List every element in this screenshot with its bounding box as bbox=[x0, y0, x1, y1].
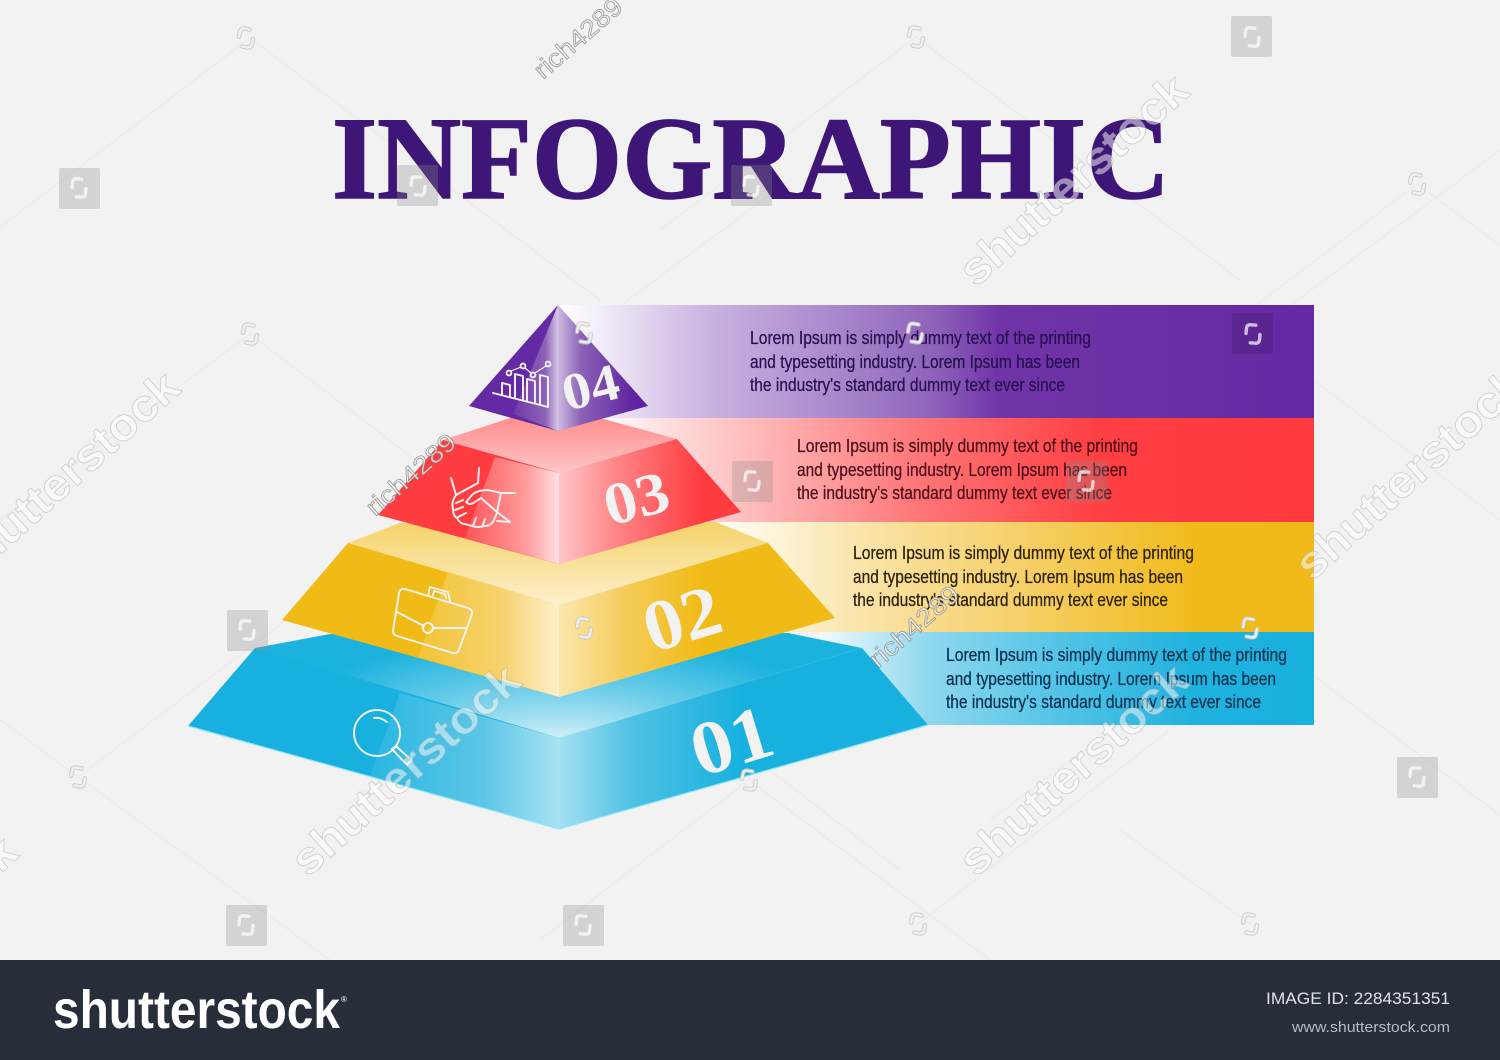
text block: banner 04: the industry's standard dummy text ever since bbox=[750, 375, 1065, 395]
text block: banner 02 bbox=[853, 543, 1194, 610]
text block: banner 01 bbox=[946, 645, 1287, 712]
watermark: shutterstock text: shutterstock bbox=[949, 63, 1199, 295]
text block: banner 03: and typesetting industry. Lorem Ipsum has been bbox=[797, 460, 1127, 480]
panel: banner 04 bbox=[558, 305, 1314, 418]
registered mark: ® bbox=[341, 995, 347, 1004]
text block: banner 04: and typesetting industry. Lorem Ipsum has been bbox=[750, 352, 1080, 372]
text block: banner 01: the industry's standard dummy text ever since bbox=[946, 692, 1261, 712]
watermark: shutterstock text: shutterstock bbox=[281, 653, 531, 885]
footer logo: shutterstock bbox=[53, 980, 341, 1040]
panel: banner 02 bbox=[700, 522, 1314, 632]
pyramid tier 04 bbox=[469, 305, 648, 431]
text block: banner 02: the industry's standard dummy text ever since bbox=[853, 590, 1168, 610]
text block: banner 04 bbox=[750, 328, 1091, 395]
text block: banner 04: Lorem Ipsum is simply dummy text of the printing bbox=[750, 328, 1091, 348]
text block: banner 02: Lorem Ipsum is simply dummy text of the printing bbox=[853, 543, 1194, 563]
panel: banner 03 bbox=[590, 418, 1314, 522]
text block: banner 02: and typesetting industry. Lorem Ipsum has been bbox=[853, 567, 1183, 587]
text block: banner 01: Lorem Ipsum is simply dummy text of the printing bbox=[946, 645, 1287, 665]
icon: bar chart bbox=[493, 362, 550, 407]
watermark: small outline logos bbox=[70, 27, 1425, 934]
icon: briefcase bbox=[393, 587, 472, 653]
text block: banner 01: and typesetting industry. Lorem Ipsum has been bbox=[946, 669, 1276, 689]
watermark: contributor name bbox=[361, 0, 965, 674]
icon: handshake bbox=[451, 468, 515, 527]
title: INFOGRAPHIC bbox=[332, 93, 1170, 224]
panel: banner 01 bbox=[820, 632, 1314, 725]
watermark: contributor name: rich4289 bbox=[361, 428, 462, 522]
number 04: 04 bbox=[556, 352, 625, 422]
pyramid tier 01 bbox=[188, 633, 928, 829]
website: www.shutterstock.com bbox=[1291, 1019, 1450, 1036]
watermark: shutterstock text: shutterstock bbox=[949, 653, 1199, 885]
image id: IMAGE ID: 2284351351 bbox=[1266, 990, 1450, 1008]
number 03: 03 bbox=[596, 458, 676, 539]
footer bar bbox=[0, 960, 1500, 1060]
number 01: 01 bbox=[681, 690, 783, 794]
text block: banner 03: the industry's standard dummy text ever since bbox=[797, 483, 1112, 503]
watermark: contributor name: rich4289 bbox=[864, 580, 965, 674]
text block: banner 03: Lorem Ipsum is simply dummy text of the printing bbox=[797, 436, 1138, 456]
text block: banner 03 bbox=[797, 436, 1138, 503]
watermark: contributor name: rich4289 bbox=[529, 0, 628, 85]
pyramid tier 02 bbox=[282, 522, 835, 697]
icon: magnifying glass bbox=[354, 710, 411, 765]
pyramid tier 03 bbox=[378, 418, 741, 564]
number 02: 02 bbox=[633, 570, 731, 669]
